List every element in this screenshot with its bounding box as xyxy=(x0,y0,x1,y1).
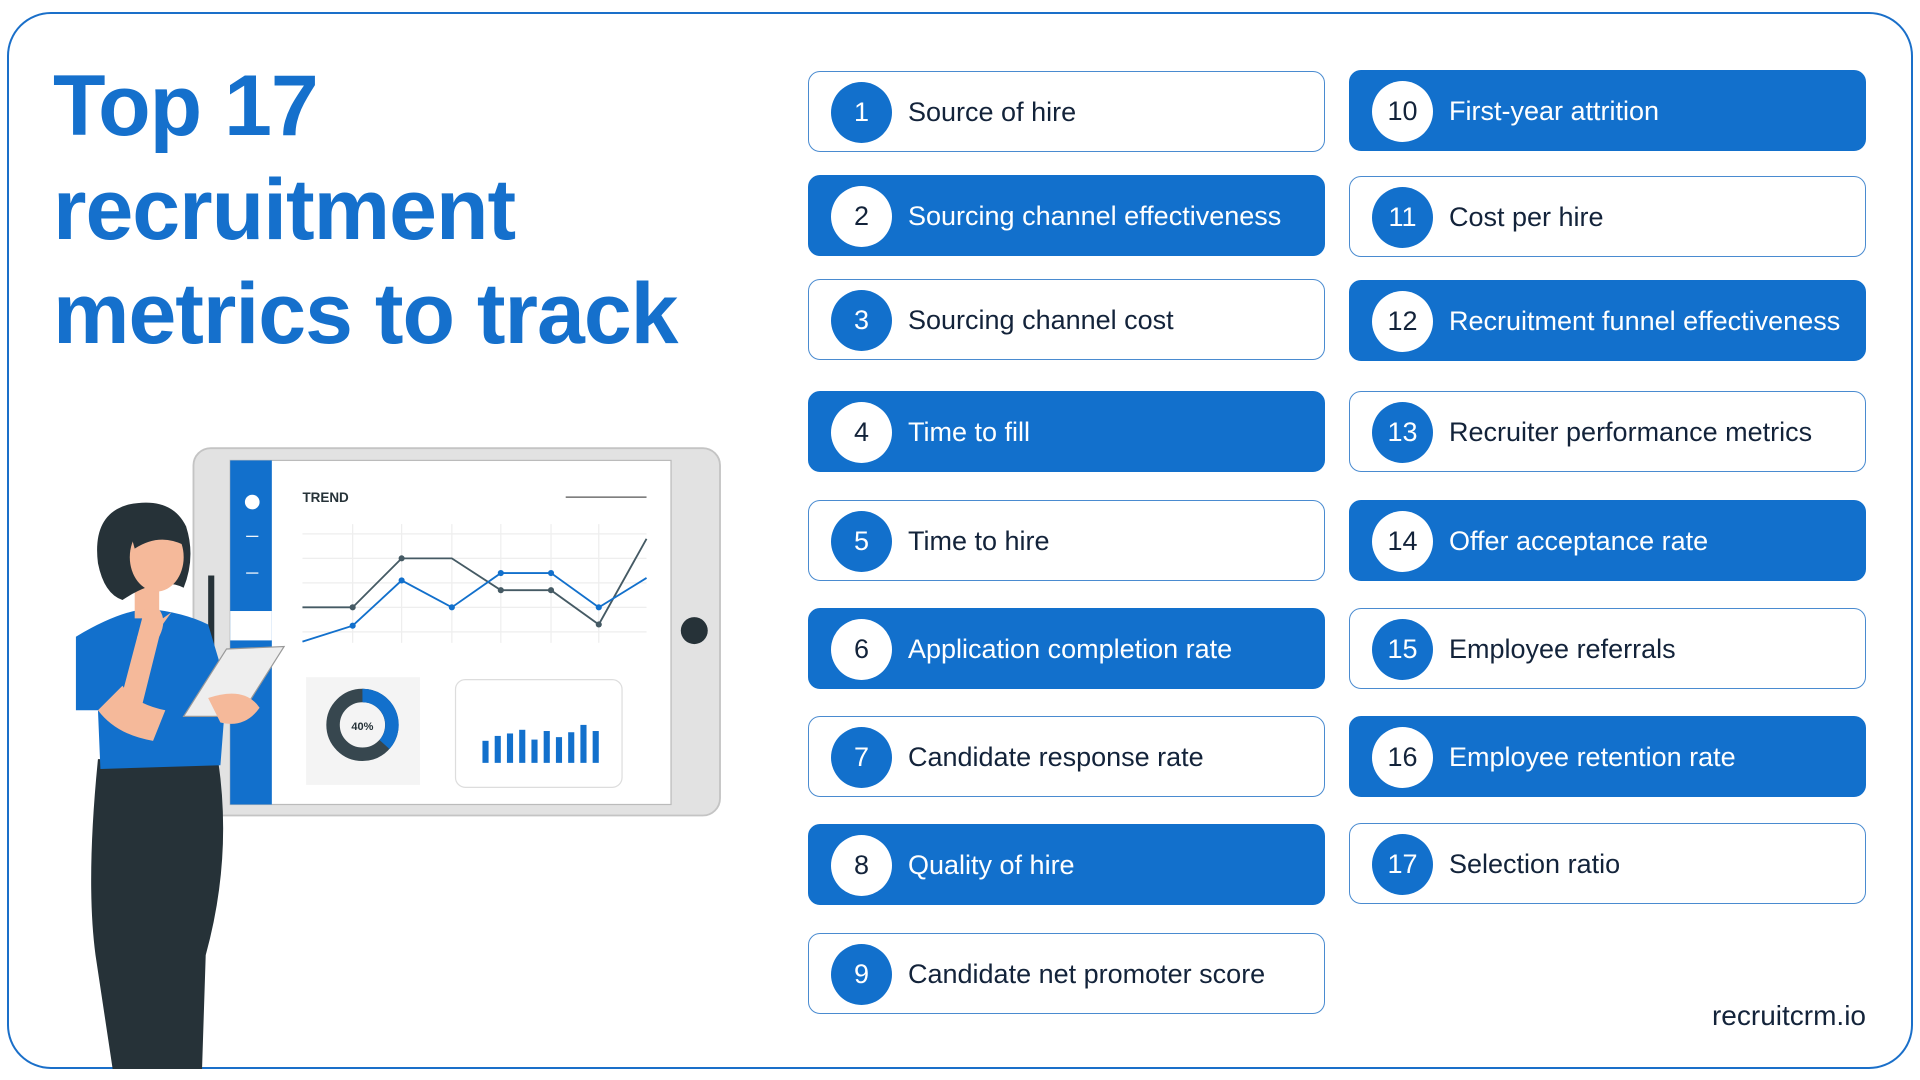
woman xyxy=(76,503,284,1069)
title: metrics to track xyxy=(53,266,678,362)
title: Top 17 xyxy=(53,58,318,154)
metric 2 xyxy=(808,175,1325,256)
metric 4: Time to fill xyxy=(908,417,1030,447)
metric 6: 6 xyxy=(854,634,869,664)
metric 9: 9 xyxy=(854,959,869,989)
metric 8 xyxy=(808,824,1325,905)
metric 14: 14 xyxy=(1387,526,1418,556)
metric 6 xyxy=(808,608,1325,689)
title: recruitment xyxy=(53,162,515,258)
metric 12: Recruitment funnel effectiveness xyxy=(1449,306,1840,336)
metric 17: 17 xyxy=(1387,849,1418,879)
metric 10: 10 xyxy=(1387,96,1418,126)
metric 3: 3 xyxy=(854,305,869,335)
metric 9 xyxy=(808,933,1325,1014)
metric 16: 16 xyxy=(1387,742,1418,772)
metric 4: 4 xyxy=(854,417,869,447)
metric 6: Application completion rate xyxy=(908,634,1232,664)
metric 8: 8 xyxy=(854,850,869,880)
metric 17: Selection ratio xyxy=(1449,849,1620,879)
metric 3 xyxy=(808,279,1325,360)
metric 9: Candidate net promoter score xyxy=(908,959,1265,989)
metric 11 xyxy=(1349,176,1866,257)
title xyxy=(53,58,678,362)
tablet: 40% xyxy=(351,721,374,733)
metric 10: First-year attrition xyxy=(1449,96,1659,126)
metric 11: 11 xyxy=(1388,202,1417,232)
metric 7: 7 xyxy=(854,742,869,772)
metric 17 xyxy=(1349,823,1866,904)
metric 4 xyxy=(808,391,1325,472)
panel: metrics list column 2 xyxy=(1349,70,1866,904)
metric 13: Recruiter performance metrics xyxy=(1449,417,1812,447)
metric 7 xyxy=(808,716,1325,797)
metric 5: 5 xyxy=(854,526,869,556)
metric 1: 1 xyxy=(854,97,869,127)
metric 12: 12 xyxy=(1387,306,1418,336)
metric 15: 15 xyxy=(1387,634,1418,664)
metric 12 xyxy=(1349,280,1866,361)
metric 5: Time to hire xyxy=(908,526,1050,556)
metric 14: Offer acceptance rate xyxy=(1449,526,1708,556)
panel: metrics list column 1 xyxy=(808,71,1325,1014)
metric 11: Cost per hire xyxy=(1449,202,1604,232)
metric 1 xyxy=(808,71,1325,152)
brand footer: recruitcrm.io xyxy=(1712,1000,1866,1031)
metric 1: Source of hire xyxy=(908,97,1076,127)
metric 14 xyxy=(1349,500,1866,581)
metric 16 xyxy=(1349,716,1866,797)
tablet: TREND xyxy=(302,490,349,505)
metric 2: 2 xyxy=(854,201,869,231)
metric 15: Employee referrals xyxy=(1449,634,1676,664)
metric 3: Sourcing channel cost xyxy=(908,305,1174,335)
metric 2: Sourcing channel effectiveness xyxy=(908,201,1281,231)
metric 16: Employee retention rate xyxy=(1449,742,1736,772)
metric 10 xyxy=(1349,70,1866,151)
metric 8: Quality of hire xyxy=(908,850,1075,880)
metric 5 xyxy=(808,500,1325,581)
metric 13: 13 xyxy=(1387,417,1418,447)
tablet xyxy=(193,448,720,816)
metric 7: Candidate response rate xyxy=(908,742,1204,772)
metric 13 xyxy=(1349,391,1866,472)
metric 15 xyxy=(1349,608,1866,689)
